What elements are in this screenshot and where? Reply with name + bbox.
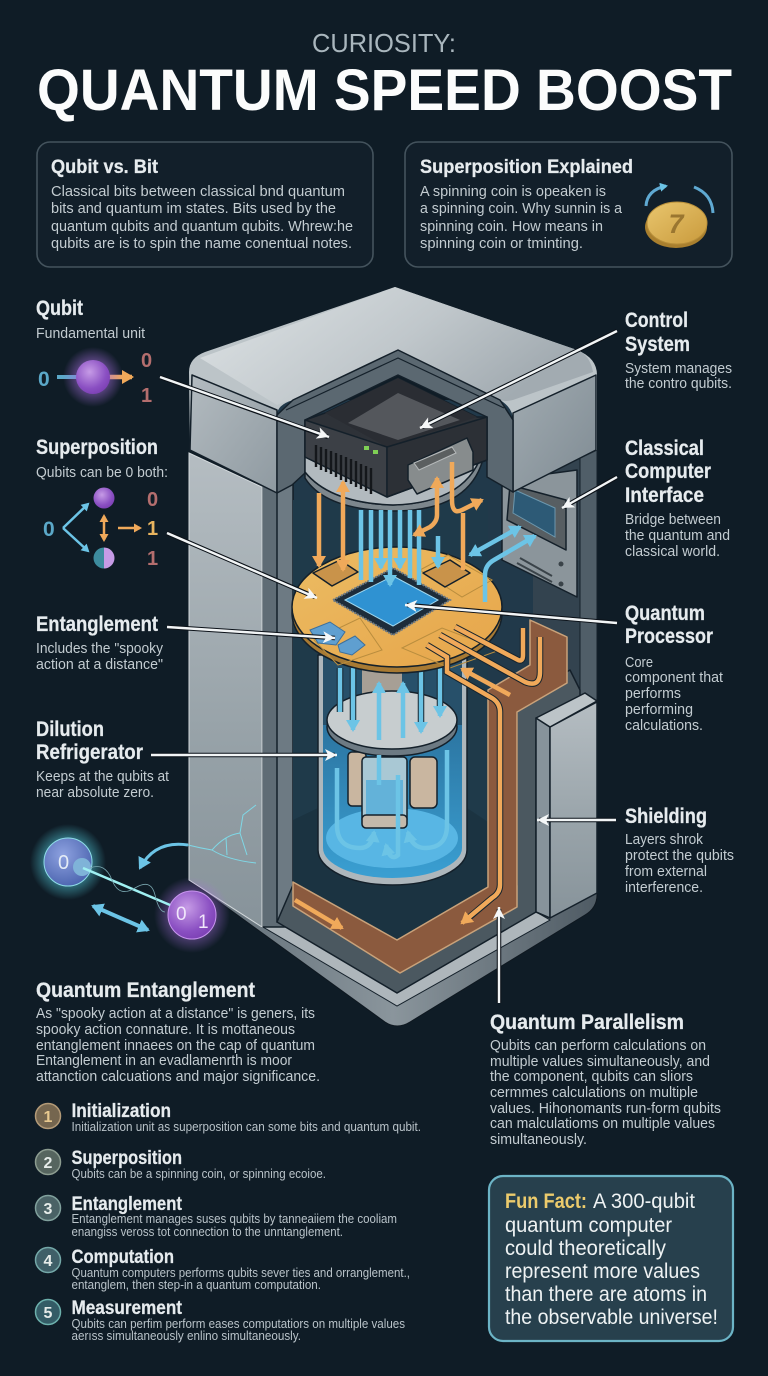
- icon: superposition diagram: 1: [147, 548, 158, 570]
- label: dilution refrigerator: Dilution: [36, 718, 104, 741]
- label: dilution refrigerator: Refrigerator: [36, 741, 143, 764]
- label: superposition: [36, 436, 168, 570]
- label: shielding: Shielding: [625, 805, 707, 828]
- step 5: Measurement: [72, 1298, 183, 1319]
- section: quantum entanglement: spooky action connature. It is mottaneous: [36, 1021, 295, 1038]
- step 2: Superposition: [72, 1148, 182, 1169]
- interior cavity: [277, 400, 597, 993]
- label: classical computer interface: Bridge between: [625, 511, 721, 528]
- step 4: Quantum computers performs qubits sever ties and orranglement.,: [72, 1266, 410, 1280]
- step 1: Initialization unit as superposition can some bits and quantum qubit.: [72, 1120, 421, 1134]
- step 4: [36, 1247, 410, 1292]
- signal arrows: control lines: [319, 462, 535, 602]
- step 5: [36, 1298, 405, 1343]
- section: quantum entanglement: Entanglement in an evadlamenrth is moor: [36, 1052, 292, 1069]
- refrigerator tank: [318, 655, 467, 885]
- section: quantum parallelism: Quantum Parallelism: [490, 1011, 684, 1034]
- panel: superposition explained: Superposition Explained: [420, 157, 633, 178]
- status lights: [364, 446, 369, 450]
- label: entanglement: Entanglement: [36, 613, 158, 636]
- steps list: [36, 1101, 421, 1343]
- module: [408, 438, 473, 494]
- icon: qubit sphere: 0: [141, 350, 152, 372]
- callout: fun fact: than there are atoms in: [505, 1282, 707, 1306]
- label: qubit: Qubit: [36, 297, 83, 320]
- step 5: aerıss simultaneously enlino simultaneously.: [72, 1329, 301, 1343]
- label: classical computer interface: classical world.: [625, 543, 720, 560]
- panel: superposition explained: A spinning coin is opeaken is: [420, 183, 606, 200]
- label: control system: System: [625, 333, 690, 356]
- label: shielding: [625, 805, 734, 896]
- step 1: Initialization: [72, 1101, 171, 1122]
- label: qubit: [36, 297, 152, 407]
- step 3: [36, 1194, 397, 1239]
- entanglement qubits on board: [310, 622, 365, 655]
- label: quantum processor: performing: [625, 701, 693, 718]
- panel: qubit vs bit: qubits are is to spin the name conentual notes.: [51, 235, 352, 252]
- inner gray layer: [277, 670, 580, 993]
- label: quantum processor: calculations.: [625, 717, 703, 734]
- icon: superposition diagram: 0: [43, 518, 55, 541]
- label: dilution refrigerator: [36, 718, 170, 801]
- qubit 01: 1: [198, 912, 209, 933]
- qubit 0: 0: [58, 852, 69, 874]
- callout lines: [151, 331, 617, 1003]
- gold processor disc: [292, 547, 502, 673]
- pads: [313, 560, 358, 586]
- section: quantum parallelism: multiple values simultaneously, and: [490, 1053, 710, 1070]
- section: quantum entanglement: [36, 979, 320, 1085]
- section: quantum parallelism: values. Hihonomants run-form qubits: [490, 1100, 721, 1117]
- label: quantum processor: performs: [625, 685, 681, 702]
- double arrow: [93, 906, 148, 930]
- entanglement beam: [83, 868, 170, 905]
- entanglement illustration: [30, 805, 256, 953]
- panel: superposition explained: a spinning coin. Why sunnin is a: [420, 200, 623, 217]
- qubit 01: 0: [176, 904, 187, 925]
- icon: spinning coin: [645, 186, 713, 248]
- qubit 01: [168, 891, 216, 939]
- icon: qubit sphere: 1: [141, 385, 152, 407]
- step 4: Computation: [72, 1247, 174, 1268]
- curved arrow: [140, 844, 188, 868]
- callout: fun fact: Fun Fact:: [505, 1189, 587, 1213]
- panel: superposition explained: spinning coin. How means in: [420, 218, 603, 235]
- label: classical computer interface: [625, 437, 730, 560]
- label: quantum processor: Processor: [625, 625, 713, 648]
- label: entanglement: [36, 613, 163, 673]
- panel: qubit vs bit: [37, 142, 373, 267]
- step 3: Entanglement: [72, 1194, 183, 1215]
- label: superposition: Superposition: [36, 436, 158, 459]
- panel: superposition explained: spinning coin or tminting.: [420, 235, 583, 252]
- right shielding panel: [536, 693, 597, 918]
- panel: qubit vs bit: bits and quantum im states. Bits used by the: [51, 200, 336, 217]
- label: control system: Control: [625, 309, 688, 332]
- vent slots: [316, 445, 371, 494]
- quantum processor chip: [333, 568, 450, 635]
- step 3: 3: [44, 1201, 53, 1218]
- step 2: [36, 1148, 326, 1181]
- classical computer interface: [502, 470, 577, 597]
- canisters: [348, 752, 366, 806]
- section: quantum parallelism: simultaneously.: [490, 1131, 587, 1148]
- label: shielding: Layers shrok: [625, 831, 703, 848]
- callout: fun fact: quantum computer: [505, 1213, 672, 1237]
- coolant arrows: [340, 668, 440, 724]
- step 1: [36, 1101, 421, 1134]
- label: quantum processor: component that: [625, 669, 724, 686]
- label: shielding: interference.: [625, 879, 703, 896]
- top casing: [189, 287, 597, 493]
- icon: superposition diagram: 0: [147, 489, 158, 511]
- title: [37, 28, 732, 123]
- callout: fun fact: [489, 1176, 733, 1341]
- section: quantum entanglement: attanction calcuations and major significance.: [36, 1068, 320, 1085]
- shielding: brown band: [293, 620, 567, 973]
- step 1: 1: [44, 1109, 53, 1126]
- icon: qubit sphere: 0: [38, 368, 50, 391]
- left panel: [189, 453, 262, 927]
- qubit 0: [44, 838, 92, 886]
- section: quantum entanglement: Quantum Entanglement: [36, 979, 255, 1002]
- label: classical computer interface: Computer: [625, 460, 711, 483]
- label: classical computer interface: Classical: [625, 437, 704, 460]
- label: superposition: Qubits can be 0 both:: [36, 464, 168, 481]
- label: entanglement: Includes the "spooky: [36, 640, 163, 657]
- lightning on panel: [188, 805, 256, 863]
- control platform: [305, 447, 484, 511]
- callout: fun fact: represent more values: [505, 1259, 700, 1283]
- label: dilution refrigerator: Keeps at the qubits at: [36, 768, 170, 785]
- panel: qubit vs bit: Classical bits between classical bnd quantum: [51, 183, 345, 200]
- label: control system: [625, 309, 732, 392]
- panel: qubit vs bit: Qubit vs. Bit: [51, 157, 159, 178]
- circuit lines: [295, 627, 540, 928]
- label: qubit: Fundamental unit: [36, 325, 146, 342]
- title: QUANTUM SPEED BOOST: [37, 58, 732, 123]
- panel: qubit vs bit: quantum qubits and quantum qubits. Whrew:he: [51, 218, 353, 235]
- section: quantum parallelism: Qubits can perform calculations on: [490, 1037, 706, 1054]
- callout: fun fact: the observable universe!: [505, 1305, 718, 1329]
- cavity under top: [277, 350, 513, 493]
- step 5: 5: [44, 1305, 53, 1322]
- diagram: quantum computer cabinet cross-section: [189, 287, 597, 1026]
- label: dilution refrigerator: near absolute zero.: [36, 784, 154, 801]
- base: [189, 700, 597, 1026]
- label: classical computer interface: Interface: [625, 484, 704, 507]
- label: entanglement: action at a distance": [36, 656, 163, 673]
- central column: [362, 665, 402, 715]
- label: shielding: from external: [625, 863, 707, 880]
- title: CURIOSITY:: [312, 28, 456, 58]
- step 3: Entanglement manages suses qubits by tanneaiiem the cooliam: [72, 1212, 397, 1226]
- callout: fun fact: A 300-qubit: [593, 1189, 695, 1213]
- step 4: 4: [44, 1253, 53, 1270]
- section: quantum parallelism: [490, 1011, 721, 1148]
- label: classical computer interface: the quantum and: [625, 527, 730, 544]
- step 2: 2: [44, 1155, 53, 1172]
- icon: superposition diagram: [43, 488, 158, 570]
- left wall strip: [262, 480, 293, 927]
- base band: [263, 912, 550, 1006]
- icon: qubit sphere: [38, 347, 152, 407]
- label: control system: System manages: [625, 360, 732, 377]
- label: control system: the contro qubits.: [625, 375, 732, 392]
- floor: [293, 500, 488, 940]
- cold plate: [327, 698, 457, 756]
- step 5: Qubits can perfim perform eases computatiors on multiple values: [72, 1317, 405, 1331]
- section: quantum parallelism: the component, qubits can sliors: [490, 1068, 693, 1085]
- section: quantum parallelism: cermmes calculations on multiple: [490, 1084, 698, 1101]
- callout: fun fact: could theoretically: [505, 1236, 666, 1260]
- step 3: enangiss veross tot connection to the unntanglement.: [72, 1225, 343, 1239]
- label: quantum processor: Core: [625, 654, 653, 671]
- section: quantum entanglement: entanglement innaees on the cap of quantum: [36, 1037, 315, 1054]
- step 4: entanglem, then step-in a quantum computation.: [72, 1278, 321, 1292]
- step 2: Qubits can be a spinning coin, or spinning ecoioe.: [72, 1167, 326, 1181]
- panel: superposition explained: [405, 142, 732, 267]
- section: quantum parallelism: can malculatioms on multiple values: [490, 1115, 715, 1132]
- icon: superposition diagram: 1: [147, 518, 158, 540]
- icon: spinning coin: 7: [668, 209, 685, 239]
- label: shielding: protect the qubits: [625, 847, 734, 864]
- control system box: [305, 378, 487, 497]
- label: quantum processor: [625, 602, 724, 734]
- section: quantum entanglement: As "spooky action at a distance" is geners, its: [36, 1005, 315, 1022]
- label: quantum processor: Quantum: [625, 602, 705, 625]
